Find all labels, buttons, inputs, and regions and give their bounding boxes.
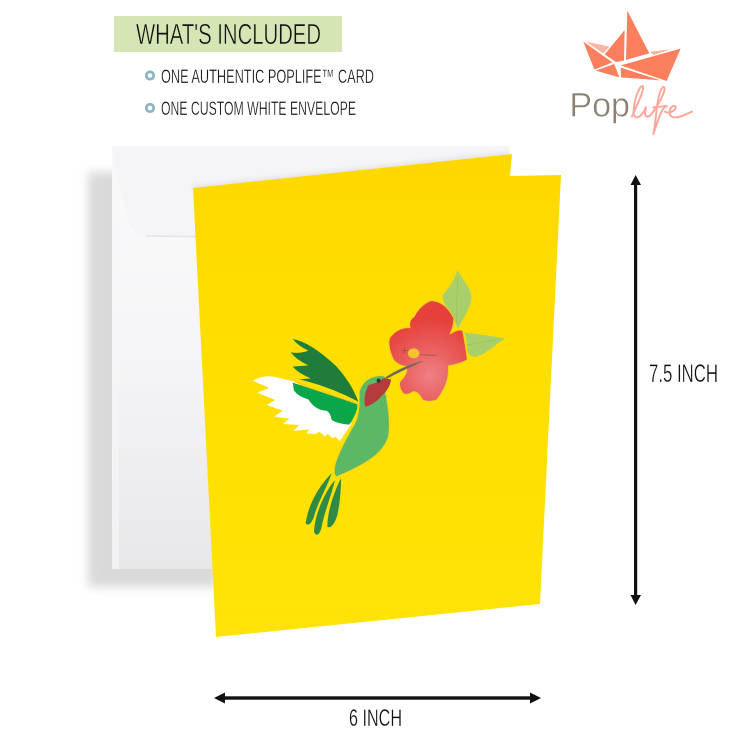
- greeting card: [193, 154, 561, 637]
- logo wordmark: life: [217, 0, 692, 134]
- illustration: hummingbird: [253, 339, 424, 535]
- envelope shadow: [88, 172, 218, 587]
- beak: [385, 361, 424, 379]
- list: included items: [146, 66, 374, 120]
- width arrow: [214, 692, 541, 704]
- item: envelope: ONE CUSTOM WHITE ENVELOPE: [161, 98, 356, 120]
- logo icon: origami boat: [583, 11, 681, 81]
- flower stamen: [408, 348, 419, 358]
- envelope body: [112, 146, 222, 569]
- wing yellow line: [294, 381, 358, 404]
- throat: [364, 378, 391, 407]
- eye: [377, 379, 381, 383]
- envelope flap: [112, 146, 509, 237]
- illustration: flower: [389, 270, 505, 401]
- card body: [193, 154, 561, 637]
- white wing: [253, 376, 352, 441]
- card shadow on flap: [193, 152, 509, 192]
- heading: what's included: [114, 16, 342, 52]
- green wing band: [293, 383, 357, 425]
- item: envelope: [146, 98, 356, 120]
- height arrow: [630, 175, 641, 605]
- envelope: [112, 146, 509, 569]
- item: authentic card: [146, 66, 374, 88]
- body: [334, 376, 389, 477]
- tail feathers: [306, 473, 341, 535]
- logo: poplife: [217, 0, 692, 134]
- flower petals: [389, 301, 467, 401]
- width label: 6 INCH: [349, 705, 402, 732]
- logo wordmark: Pop: Pop: [569, 87, 630, 125]
- item: authentic card: ONE AUTHENTIC POPLIFE™ CARD: [161, 66, 374, 88]
- dark upper wing: [291, 339, 358, 402]
- flower leaves: [442, 270, 505, 357]
- envelope side seam: [112, 165, 119, 569]
- heading: what's included: WHAT'S INCLUDED: [136, 19, 321, 51]
